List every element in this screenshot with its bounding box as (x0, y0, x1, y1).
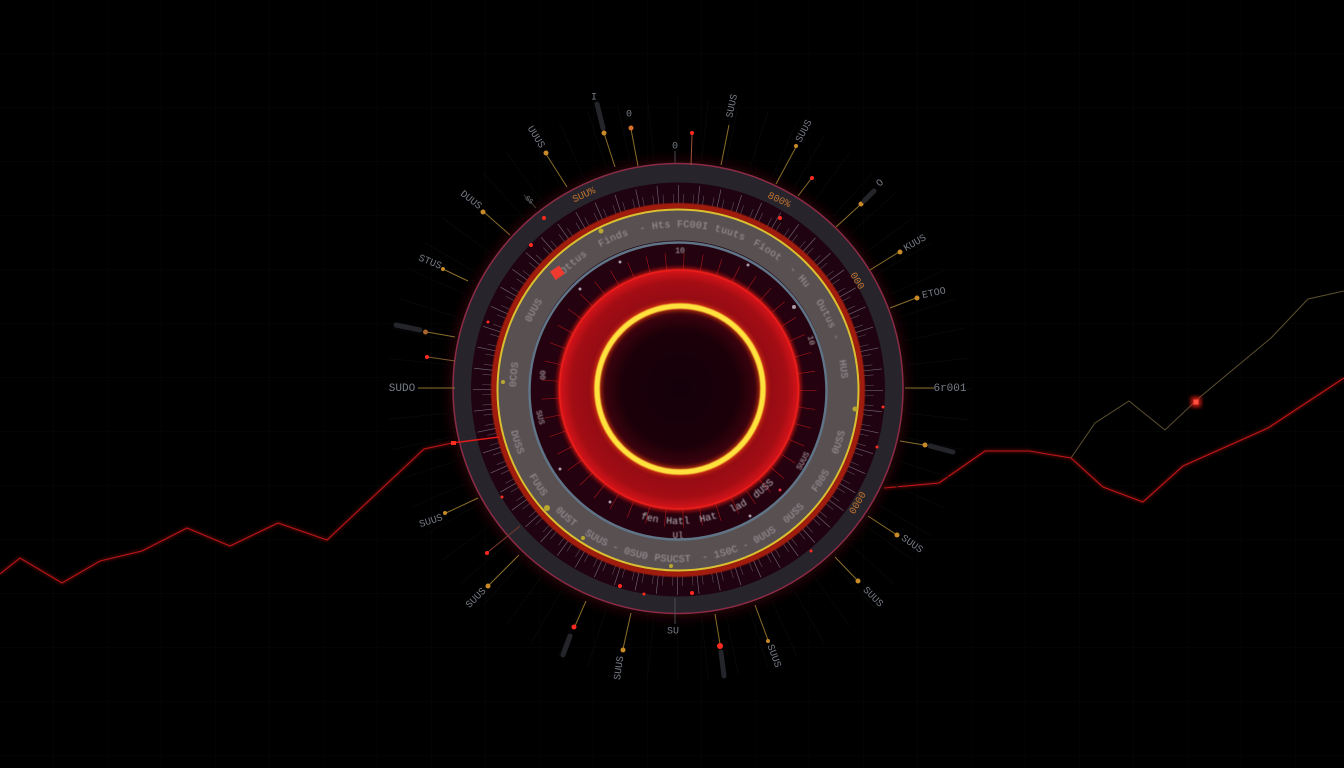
inner bottom arc text: lad (729, 498, 748, 512)
spoke 15: SUUS (860, 585, 885, 610)
bottom arc text: FUUS (530, 473, 548, 496)
gold band labels (571, 186, 870, 517)
top arc text: 0COS (509, 362, 518, 387)
red disc (559, 270, 799, 510)
long ticks (485, 197, 871, 583)
spoke 14: SUUS (898, 534, 924, 556)
inner bottom arc text: Hatl (666, 516, 690, 525)
top arc text: Finds (598, 230, 628, 247)
gold label right lower: 0000 (848, 490, 870, 517)
top arc text: 0UUS (525, 298, 542, 322)
inner right label: 10 (805, 335, 816, 347)
spoke 22 (485, 526, 520, 555)
inner bottom arc text: dUSS (753, 478, 774, 498)
spoke 24 (389, 383, 455, 395)
callouts: radial spokes with labels (389, 93, 967, 681)
spoke 27: STUS (416, 253, 443, 273)
spoke 6 (721, 93, 741, 165)
spoke 6: SUUS (725, 93, 741, 119)
yellow ring (498, 210, 858, 570)
red marker on ring (550, 265, 565, 280)
ring text: gray band (509, 220, 848, 562)
spoke 15 (835, 557, 885, 610)
inner top label: 10 (675, 247, 685, 256)
spoke 27 (416, 253, 468, 281)
inner sub label: Ul (673, 531, 683, 541)
top arc text: tuuts (716, 224, 745, 240)
spoke 19: SUUS (613, 656, 627, 681)
bottom arc text: - 0UUS (744, 526, 776, 546)
top arc text: HUS (839, 360, 848, 378)
ring text: inner maroon band (533, 246, 816, 541)
inner bottom arc text: Hat (698, 512, 717, 523)
spoke 11: ETOO (921, 286, 947, 302)
dark core (597, 306, 763, 472)
bottom arc text: PSUCST (654, 554, 690, 562)
spoke 1: UUUS (524, 125, 546, 151)
spoke 28: DUUS (457, 189, 483, 213)
red halo edge of yellow ring (494, 206, 862, 574)
top arc text: Ottus (560, 252, 586, 274)
chart: red line crossing the outer band (451, 437, 499, 445)
spoke 24: SUDO (389, 383, 416, 395)
top arc text: Outus - (816, 299, 837, 338)
spoke 10 (870, 233, 929, 270)
spoke 23 (418, 498, 478, 531)
inner band small dots (558, 260, 796, 518)
top arc text (509, 220, 848, 387)
spoke 12 (905, 383, 967, 395)
spoke 2: I (591, 93, 597, 104)
spoke 12: 6r001 (933, 383, 967, 395)
scattered band dots (486, 216, 884, 596)
chart: olive trend line (1071, 291, 1344, 458)
spoke 25 (425, 355, 455, 361)
spoke 7 (776, 118, 816, 184)
marker: red data point (1191, 397, 1201, 407)
inner bottom arc text (642, 478, 774, 525)
bottom arc text: - 0SU0 - (614, 546, 658, 560)
chart: right red trend line (884, 378, 1344, 502)
spoke 10: KUUS (902, 233, 929, 255)
inner right lower label: SUUS (795, 451, 812, 472)
bottom arc text: 0USS (832, 430, 845, 454)
gauge: concentric rings (416, 127, 940, 651)
outer halo (449, 160, 907, 618)
spoke 17 (715, 614, 724, 676)
spoke 5 (690, 131, 694, 165)
spoke 16 (755, 605, 782, 670)
spoke 23: SUUS (418, 513, 444, 531)
spoke 13 (900, 441, 953, 452)
spoke 18: SU (667, 627, 679, 638)
bottom arc text: SUUS (585, 529, 608, 546)
spoke 21: SUUS (464, 586, 489, 611)
inner red ticks (550, 261, 808, 519)
spoke 19 (613, 613, 631, 681)
top arc text: - Hts FC00I (640, 220, 708, 230)
yellow core ring glow (597, 306, 763, 472)
spoke 29: SS (523, 195, 534, 206)
red disc edge (560, 270, 798, 509)
short ticks (489, 201, 867, 579)
top arc text: Fioot (754, 239, 781, 261)
spoke 18 (667, 598, 679, 638)
spoke 20 (563, 601, 586, 655)
gray text band (513, 225, 843, 555)
spoke 9 (836, 178, 887, 227)
spoke 21 (464, 555, 519, 611)
gold label top right: 800% (765, 191, 792, 211)
bottom arc text: - 1S0C (703, 545, 738, 558)
red disc glow (557, 268, 801, 512)
outer gray band (453, 164, 903, 614)
spoke 4 (672, 142, 678, 163)
spoke 14 (868, 516, 924, 556)
spoke 26 (396, 325, 455, 337)
bottom arc text: DUSS (510, 430, 524, 454)
bottom arc text: F00S (811, 469, 829, 492)
spoke 28 (457, 189, 510, 235)
spoke 11 (890, 286, 947, 308)
bottom arc text (510, 430, 845, 562)
spoke 3: 0 (626, 110, 632, 121)
spoke 4: 0 (672, 142, 678, 153)
spoke 9: O (875, 178, 887, 190)
inner left label: 00 (537, 370, 546, 380)
spoke 7: SUUS (795, 118, 816, 145)
inner bottom arc text: fen (642, 512, 658, 523)
inner left lower label: SUS (533, 409, 546, 426)
chart: left red trend line (0, 443, 452, 583)
spoke 2 (591, 93, 615, 167)
bottom arc text: 0USS (783, 503, 804, 523)
top arc text: - Hu (792, 268, 810, 288)
yellow ring nodes (501, 228, 858, 568)
gold label right upper: 000 (847, 271, 865, 292)
bottom arc text: 0UST (556, 506, 578, 526)
maroon tick band (471, 182, 885, 596)
spoke 8 (798, 176, 814, 196)
inner maroon band (530, 242, 826, 540)
spoke 16: SUUS (764, 643, 782, 670)
yellow core ring (597, 306, 763, 472)
spoke 3 (626, 110, 638, 166)
faint outer radial ticks (416, 127, 940, 651)
spoke 1 (524, 125, 567, 187)
gold label top left: SUU% (571, 186, 598, 206)
